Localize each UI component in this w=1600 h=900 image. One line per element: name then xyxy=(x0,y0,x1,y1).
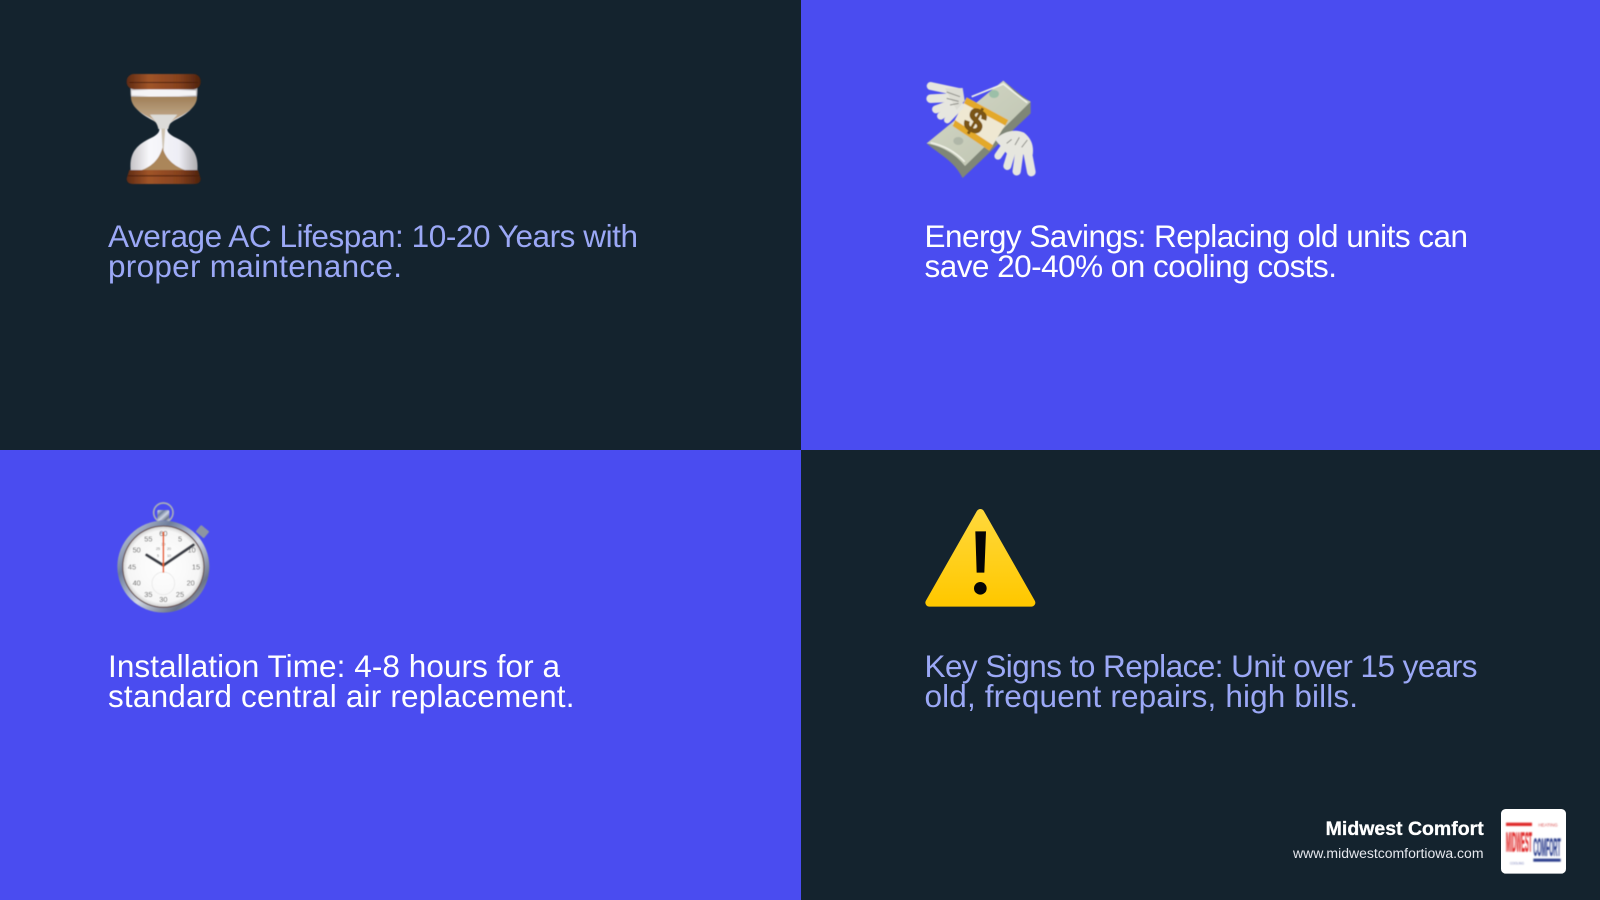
icon: stopwatch: 20 xyxy=(187,578,195,587)
icon: warning triangle xyxy=(929,513,1031,603)
text: average AC lifespan: Average AC Lifespan: 10-20 Years with xyxy=(108,218,638,254)
icon: stopwatch: 25 xyxy=(156,547,160,551)
text: installation time: standard central air replacement. xyxy=(108,678,574,714)
text: average AC lifespan xyxy=(108,218,638,284)
icon: stopwatch: 30 xyxy=(161,542,165,546)
icon: stopwatch: 20 xyxy=(167,547,171,551)
icon: stopwatch: 50 xyxy=(133,546,141,555)
icon: hourglass xyxy=(127,74,201,184)
brand name: Midwest Comfort xyxy=(1326,819,1484,840)
text: energy savings: save 20-40% on cooling costs. xyxy=(924,248,1337,284)
icon: stopwatch: 40 xyxy=(133,578,141,587)
text: installation time xyxy=(108,648,574,714)
right wing xyxy=(995,131,1033,155)
logo: COOLING xyxy=(1510,860,1524,865)
icon: stopwatch: 10 xyxy=(188,546,196,555)
text: energy savings xyxy=(924,218,1468,284)
icon: stopwatch: 35 xyxy=(144,590,152,599)
icon: stopwatch: 5 xyxy=(157,554,159,558)
panel: installation time xyxy=(0,450,801,900)
text: average AC lifespan: proper maintenance. xyxy=(108,248,402,284)
text: energy savings: Energy Savings: Replacing old units can xyxy=(924,218,1468,254)
icon: stopwatch: 30 xyxy=(159,595,167,604)
text: key signs to replace: old, frequent repairs, high bills. xyxy=(924,678,1358,714)
icon: stopwatch xyxy=(117,503,209,613)
icon: stopwatch: 55 xyxy=(144,534,152,543)
brand footer xyxy=(1292,809,1566,874)
panel: energy savings xyxy=(801,0,1600,450)
text: installation time: Installation Time: 4-8 hours for a xyxy=(108,648,560,684)
icon: money with wings: $ xyxy=(957,99,993,143)
brand url: www.midwestcomfortiowa.com xyxy=(1292,846,1484,861)
text: key signs to replace: Key Signs to Replace: Unit over 15 years xyxy=(924,648,1478,684)
logo xyxy=(1501,809,1566,874)
icon: stopwatch: 5 xyxy=(178,535,182,544)
icon: stopwatch: 60 xyxy=(159,529,167,538)
text: key signs to replace xyxy=(924,648,1478,714)
icon: stopwatch: 15 xyxy=(192,562,200,571)
icon: stopwatch: 10 xyxy=(167,554,171,558)
icon: money with wings xyxy=(927,81,1033,178)
panel: key signs to replace xyxy=(801,450,1600,900)
panel: average AC lifespan xyxy=(0,0,801,450)
icon: stopwatch: 25 xyxy=(176,590,184,599)
left wing xyxy=(931,86,961,120)
logo: HEATING xyxy=(1538,823,1558,828)
icon: stopwatch: 45 xyxy=(128,562,136,571)
